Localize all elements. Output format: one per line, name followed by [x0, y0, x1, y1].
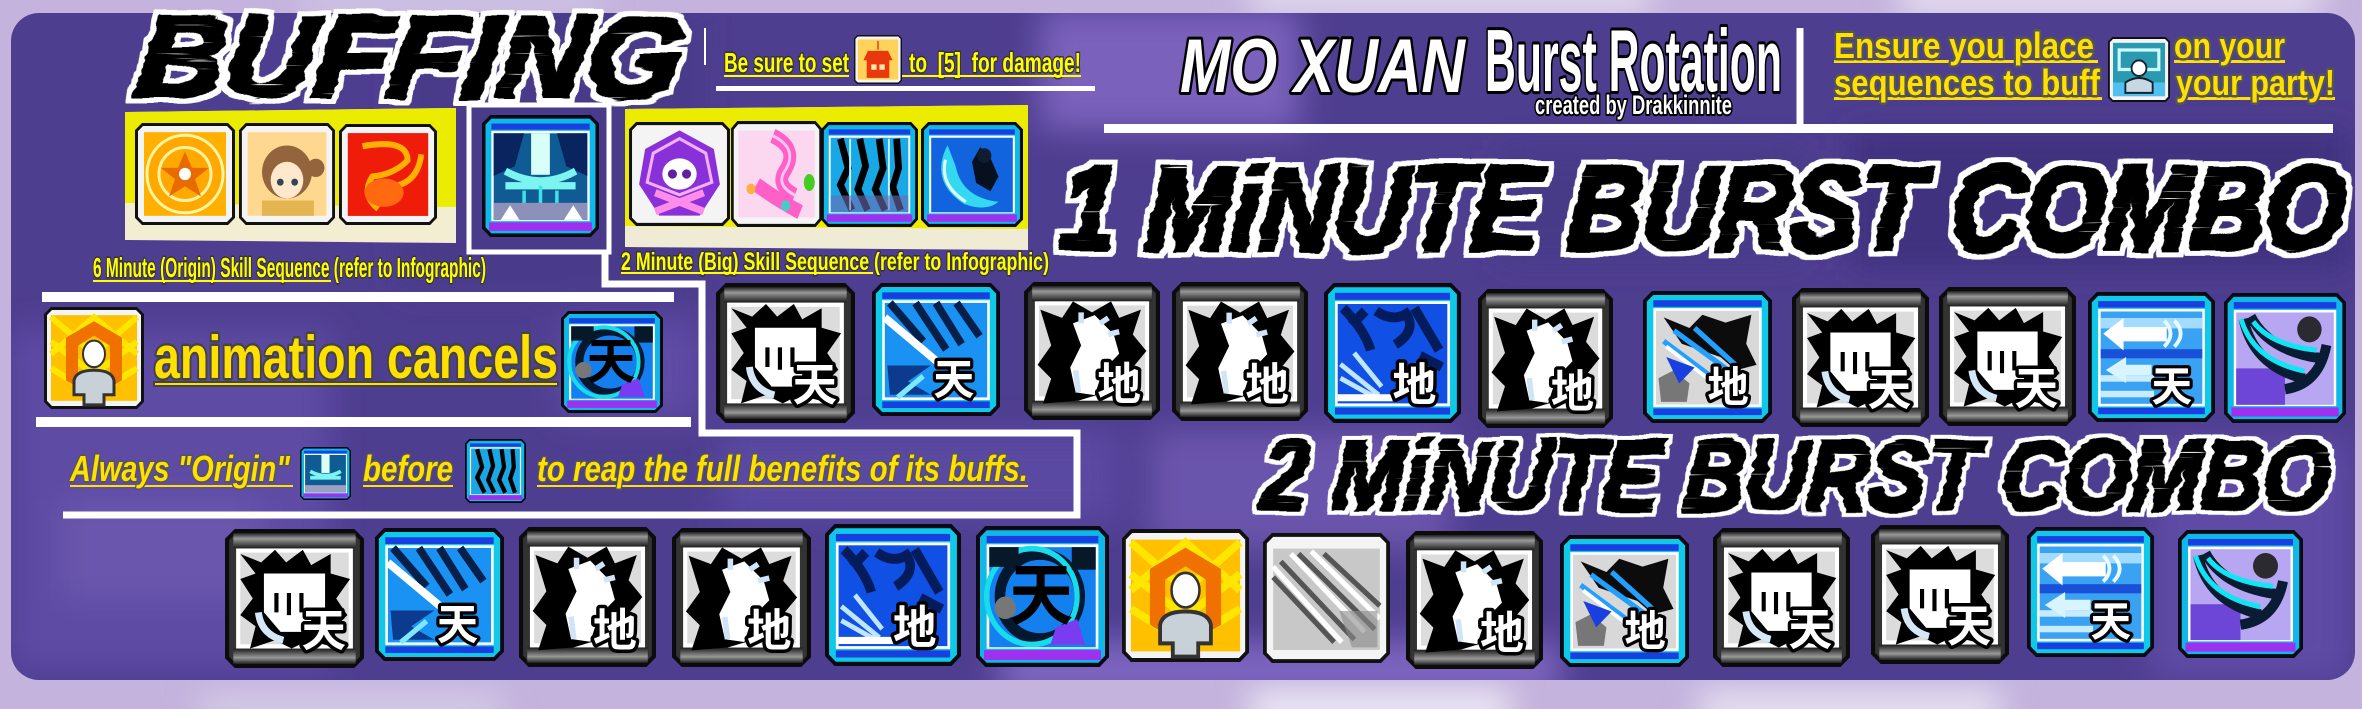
icon: monk [44, 307, 144, 409]
icon: foot 2: 地 [747, 594, 792, 659]
combo row: 2 minute [225, 524, 2303, 669]
icon: fist 1: 天 [301, 594, 346, 659]
icon: swirl [2178, 530, 2303, 658]
icon: origin skill [482, 115, 599, 237]
icon: foot 1: 地 [1097, 348, 1141, 412]
icon: foot 2: 地 [1245, 349, 1289, 413]
icon: foot 2 [1172, 282, 1308, 421]
icon: fist 3 [1871, 525, 2009, 664]
icon: fist 3: 天 [1947, 591, 1991, 655]
icon: ground burst [1324, 283, 1461, 423]
icon: fist 1 [716, 283, 855, 423]
icon: foot 3: 地 [1551, 355, 1594, 420]
icon: foot 2 [672, 528, 811, 667]
icon: grey slash [1263, 533, 1390, 663]
icon: sky strike 1: 天 [933, 347, 974, 408]
combo row: 1 minute [716, 282, 2346, 428]
note: place on sequences: sequences to buff [1834, 62, 2101, 103]
icon: ground slash [1643, 291, 1772, 423]
caption: 6 minute sequence: 6 Minute (Origin) Skill Sequence (refer to Infographic) [93, 252, 486, 283]
icon: foot 3 [1406, 531, 1543, 669]
icon: fist 2: 天 [1867, 353, 1911, 418]
icon: wave arrows: 天 [2151, 353, 2192, 413]
note: always origin [69, 439, 1028, 503]
icon: ring strike: 天 [586, 322, 635, 393]
icon: skull [629, 122, 730, 226]
icon: fist 1: 天 [792, 348, 837, 414]
icon: pink flame [731, 121, 822, 227]
icon: ground slash [1560, 535, 1689, 667]
title: Mo Xuan: MO XUAN [1180, 24, 1467, 109]
icon: fist 3: 天 [2014, 352, 2058, 417]
icon: fist 2: 天 [1788, 593, 1832, 658]
icon: ring strike: 天 [1009, 541, 1073, 639]
credit: created by Drakkinnite [1535, 90, 1732, 120]
icon: fist 3 [1939, 287, 2076, 426]
icon: orange pagoda [854, 35, 902, 84]
caption: 2 minute sequence: 2 Minute (Big) Skill Sequence (refer to Infographic) [621, 248, 1049, 276]
panel: 2 minute big sequence [625, 105, 1028, 250]
icon: ground burst [825, 524, 961, 666]
note: animation cancels: animation cancels [154, 324, 558, 391]
note: place on sequences [1834, 25, 2335, 103]
icon: star seal [135, 123, 235, 225]
icon: foot 3: 地 [1480, 597, 1524, 661]
note: set to 5 for damage: Be sure to set [724, 47, 849, 78]
note: always origin: Always "Origin" [69, 448, 291, 489]
text: Burst Rotation [1485, 11, 1782, 110]
icon: fist 1 [225, 529, 364, 668]
icon: girl portrait [239, 123, 335, 225]
note: always origin: before [363, 448, 453, 489]
icon: foot 1 [1024, 282, 1160, 420]
icon: sky strike 1 [872, 283, 1000, 416]
icon: sky strike: 天 [437, 591, 478, 653]
icon: blue person [2108, 37, 2170, 102]
icon: swirl [2224, 293, 2346, 423]
note: set to 5 for damage: to [5] for damage! [909, 47, 1081, 78]
icon: ring strike [561, 311, 663, 413]
icon: ground slash: 地 [1707, 354, 1749, 415]
icon: foot 3 [1478, 289, 1613, 428]
icon: dark lightning [821, 122, 918, 227]
icon: lightning small [465, 439, 526, 503]
panel: 6 minute origin sequence [125, 108, 456, 243]
icon: crescent moon [921, 122, 1023, 227]
icon: foot 1: 地 [593, 594, 637, 659]
icon: ground burst: 地 [893, 590, 937, 657]
note: animation cancels [44, 307, 663, 413]
icon: wave arrows [2027, 527, 2154, 657]
note: always origin: to reap the full benefits of its buffs. [537, 448, 1028, 489]
icon: red flame [339, 124, 437, 225]
icon: ring strike [976, 526, 1109, 667]
note: place on sequences: your party! [2176, 62, 2335, 103]
icon: monk [1122, 529, 1249, 662]
icon: fist 2 [1792, 288, 1929, 427]
note: place on sequences: Ensure you place [1834, 25, 2094, 66]
icon: wave arrows: 天 [2090, 588, 2131, 648]
icon: foot 1 [519, 527, 656, 667]
icon: sky strike [375, 528, 504, 661]
separators and frames [36, 28, 2333, 515]
icon: fist 2 [1713, 528, 1850, 667]
icon: ground slash: 地 [1624, 598, 1666, 659]
icon: origin small [300, 447, 351, 500]
icon: wave arrows [2088, 292, 2215, 422]
note: place on sequences: on your [2174, 25, 2285, 66]
icon: ground burst: 地 [1393, 349, 1436, 414]
note: set to 5 for damage [724, 35, 1081, 84]
